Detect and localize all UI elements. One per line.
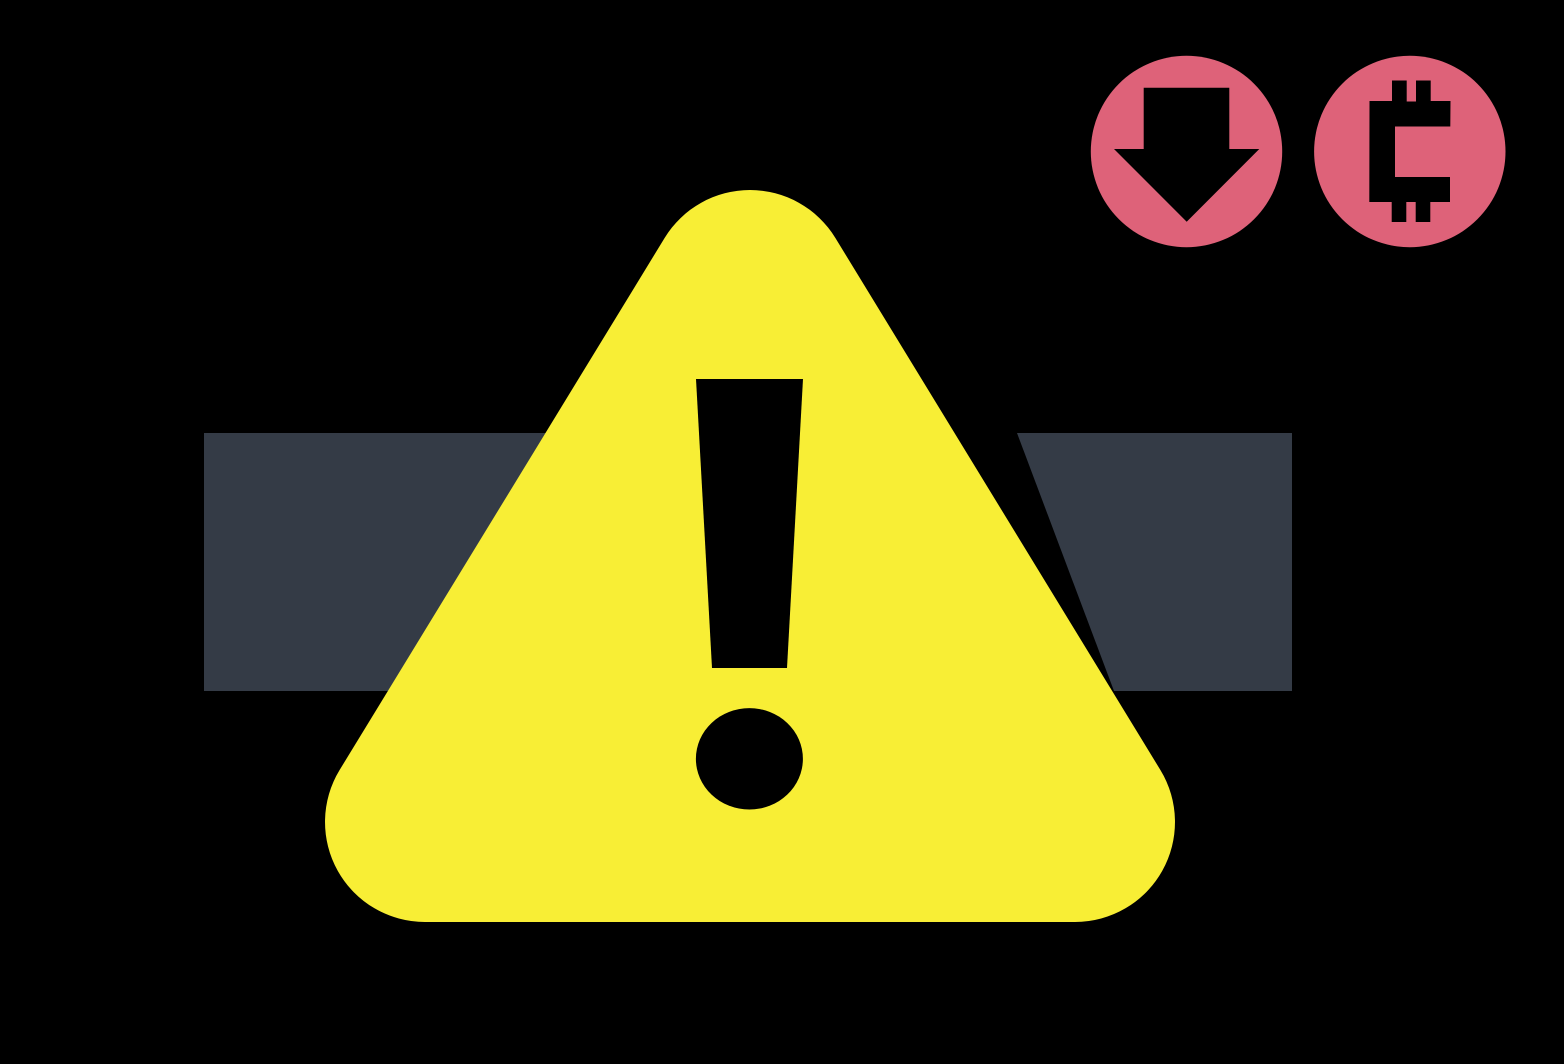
icon: bitcoin badge [1314,56,1506,247]
dark banner behind the warning sign [204,433,1292,691]
exclamation mark [696,379,803,810]
icon: down arrow badge [1091,56,1282,247]
icon: yellow warning triangle [325,190,1175,922]
